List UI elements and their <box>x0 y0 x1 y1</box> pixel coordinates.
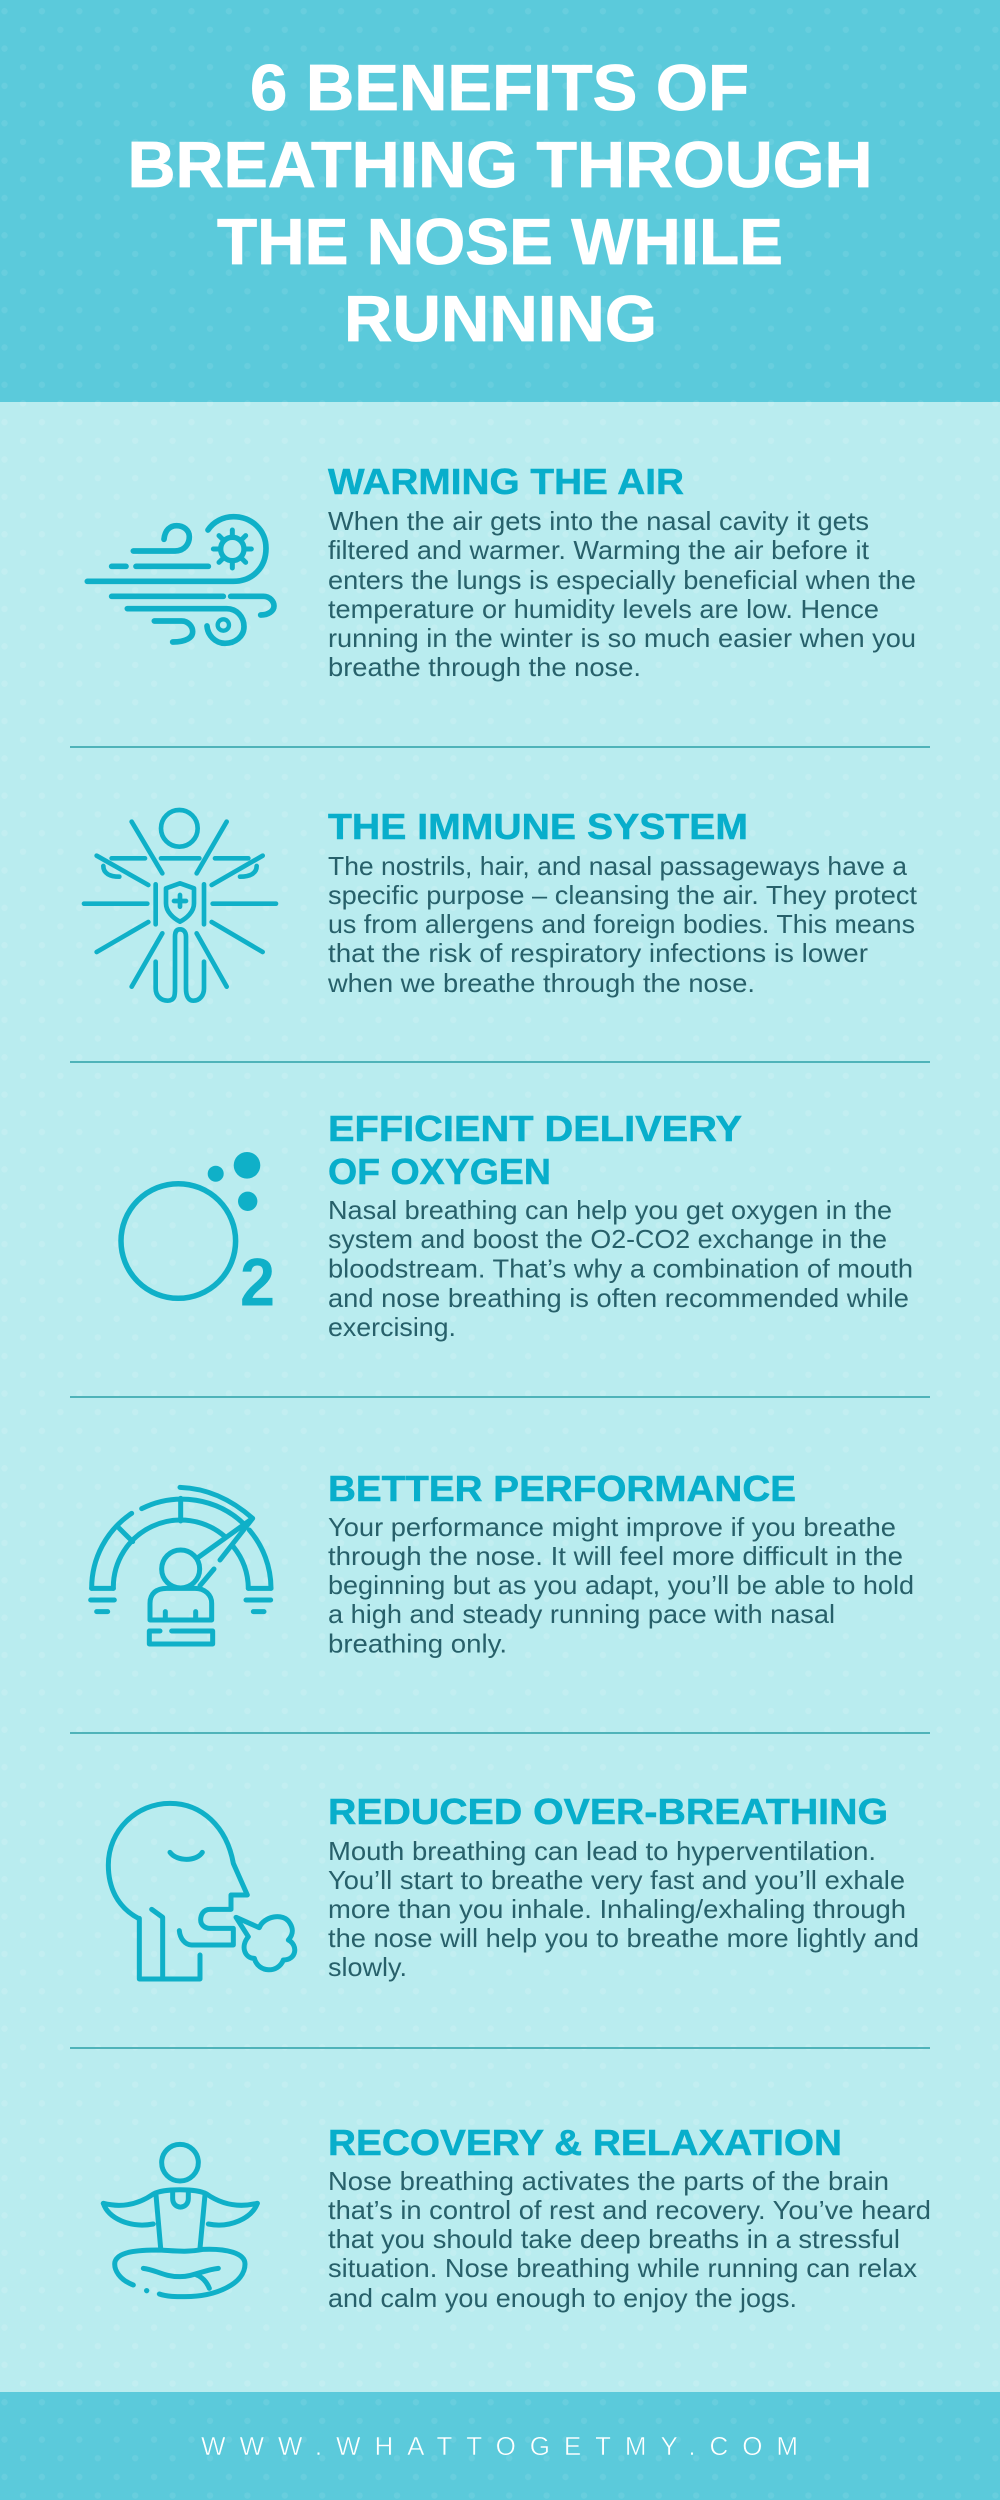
text block: slowly. <box>328 1952 407 1982</box>
text block: more than you inhale. Inhaling/exhaling through <box>328 1894 906 1924</box>
text block: that the risk of respiratory infections is lower <box>328 938 868 968</box>
text block: that’s in control of rest and recovery. You’ve heard <box>328 2195 931 2225</box>
text block <box>328 2166 931 2313</box>
panel: reduced over-breathing <box>108 1791 919 1982</box>
title <box>128 51 872 355</box>
text block: filtered and warmer. Warming the air before it <box>328 535 870 565</box>
website url: WWW.WHATTOGETMY.COM <box>201 2431 798 2461</box>
text block: You’ll start to breathe very fast and you’ll exhale <box>328 1865 905 1895</box>
icon: person and speedometer <box>91 1487 271 1644</box>
text block: a high and steady running pace with nasal <box>328 1599 835 1629</box>
text block: and calm you enough to enjoy the jogs. <box>328 2283 797 2313</box>
icon: head exhaling <box>108 1803 295 1979</box>
heading: THE IMMUNE SYSTEM <box>328 806 748 847</box>
text block: bloodstream. That’s why a combination of mouth <box>328 1254 913 1284</box>
text block: When the air gets into the nasal cavity it gets <box>328 506 869 536</box>
icon: O2 molecule <box>121 1152 275 1320</box>
text block: beginning but as you adapt, you’ll be able to hold <box>328 1570 914 1600</box>
icon: wind and sun <box>87 517 274 643</box>
text block: breathe through the nose. <box>328 652 641 682</box>
text block: situation. Nose breathing while running can relax <box>328 2253 917 2283</box>
panel: warming the air <box>87 461 916 682</box>
footer band <box>0 2392 1000 2500</box>
text block: system and boost the O2-CO2 exchange in the <box>328 1224 887 1254</box>
text block: specific purpose – cleansing the air. They protect <box>328 880 918 910</box>
heading: EFFICIENT DELIVERY <box>328 1108 742 1149</box>
text block <box>327 851 918 998</box>
text block <box>328 506 916 682</box>
title: BREATHING THROUGH <box>128 128 872 201</box>
text block: the nose will help you to breathe more lightly and <box>328 1923 919 1953</box>
title: 6 BENEFITS OF <box>250 51 749 124</box>
page background <box>0 402 1000 2392</box>
text block: Mouth breathing can lead to hyperventilation. <box>328 1836 876 1866</box>
header band <box>0 0 1000 402</box>
panel: the immune system <box>84 806 918 1001</box>
panel: efficient delivery of oxygen <box>121 1108 913 1342</box>
heading: RECOVERY & RELAXATION <box>328 2122 842 2163</box>
text block: running in the winter is so much easier when you <box>328 623 916 653</box>
text block: Nasal breathing can help you get oxygen in the <box>328 1195 892 1225</box>
panel: better performance <box>91 1468 914 1658</box>
text block: temperature or humidity levels are low. Hence <box>328 594 879 624</box>
text block: Your performance might improve if you breathe <box>328 1512 896 1542</box>
text block: exercising. <box>328 1312 456 1342</box>
heading: BETTER PERFORMANCE <box>328 1468 796 1509</box>
icon: body with shield <box>84 810 276 1001</box>
title: RUNNING <box>344 282 657 355</box>
text block: Nose breathing activates the parts of the brain <box>328 2166 889 2196</box>
icon: O2 molecule: 2 <box>240 1244 275 1320</box>
text block: through the nose. It will feel more difficult in the <box>328 1541 903 1571</box>
icon: meditating figure <box>103 2144 257 2297</box>
text block: The nostrils, hair, and nasal passageways have a <box>328 851 908 881</box>
heading <box>328 1108 742 1192</box>
heading: REDUCED OVER-BREATHING <box>328 1791 888 1832</box>
text block <box>328 1836 919 1982</box>
text block <box>328 1195 913 1342</box>
panel: recovery and relaxation <box>103 2122 931 2313</box>
title: THE NOSE WHILE <box>217 205 783 278</box>
heading: WARMING THE AIR <box>328 461 684 502</box>
text block: when we breathe through the nose. <box>327 968 755 998</box>
text block: that you should take deep breaths in a stressful <box>328 2224 900 2254</box>
text block <box>328 1512 914 1658</box>
heading: OF OXYGEN <box>328 1151 551 1192</box>
text block: us from allergens and foreign bodies. This means <box>328 909 915 939</box>
text block: enters the lungs is especially beneficial when the <box>328 565 916 595</box>
text block: and nose breathing is often recommended while <box>328 1283 909 1313</box>
text block: breathing only. <box>328 1628 507 1658</box>
